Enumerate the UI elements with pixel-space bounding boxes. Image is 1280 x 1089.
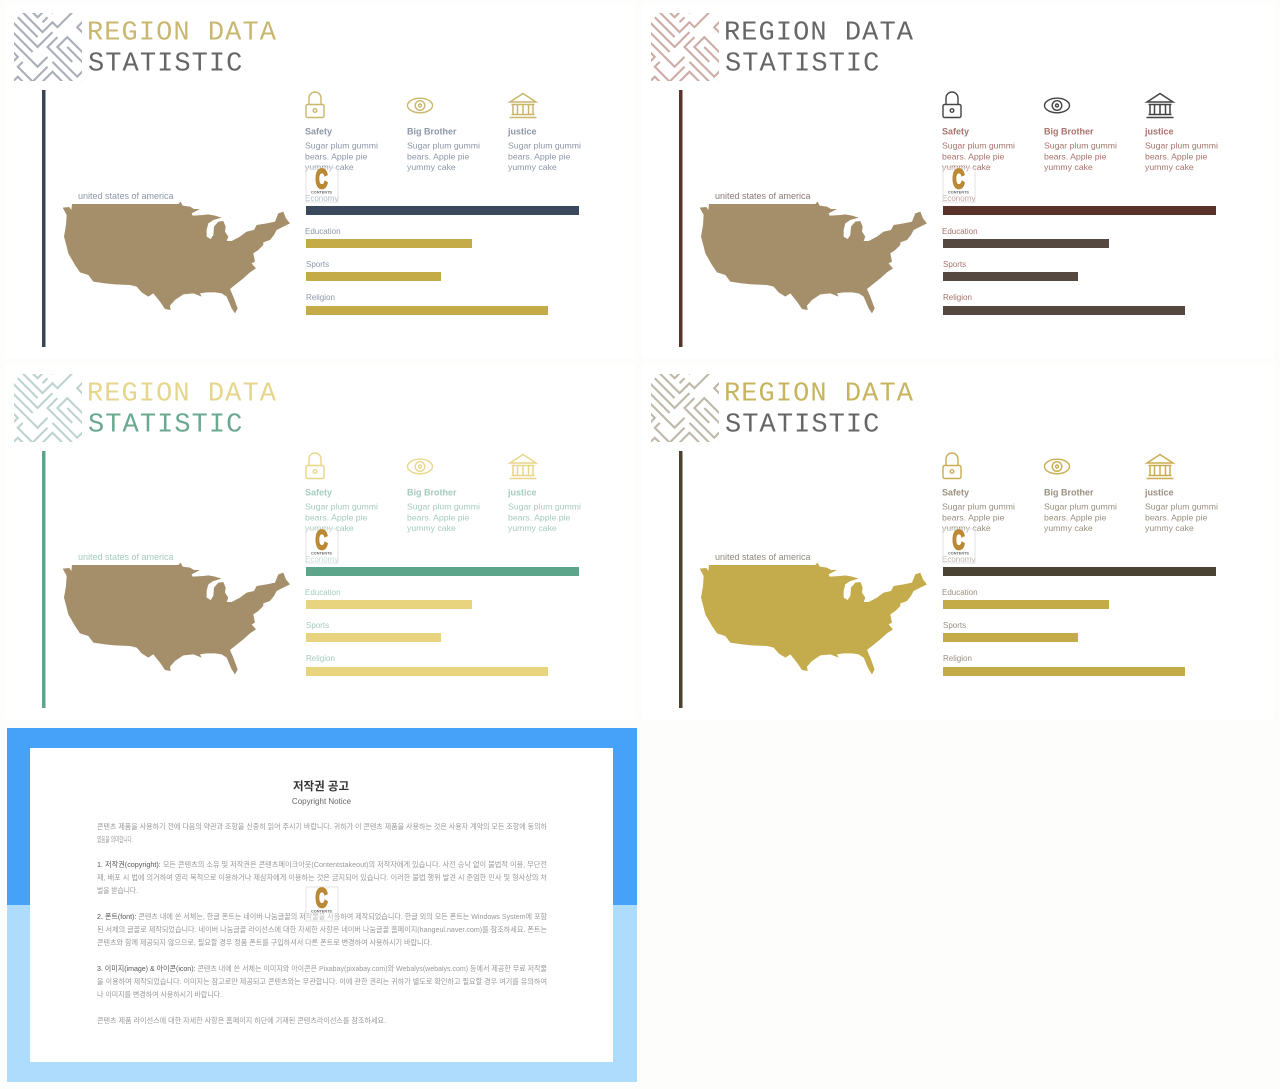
- logo watermark: [306, 525, 338, 563]
- pattern tile: [615, 339, 754, 477]
- bar chart: Education: [305, 588, 341, 597]
- bar chart: Economy: [305, 194, 338, 203]
- features: yummy cake: [305, 162, 354, 172]
- features: Sugar plum gummi: [1145, 502, 1218, 512]
- icon: bank: [510, 454, 536, 478]
- bar chart: Religion: [943, 293, 972, 302]
- features: [942, 488, 1218, 533]
- panel: slide 3 teal and pale yellow: [0, 339, 581, 708]
- bar chart: Sports: [306, 260, 329, 269]
- features: Big Brother: [407, 126, 457, 136]
- features: Big Brother: [1044, 126, 1094, 136]
- features: yummy cake: [1044, 162, 1093, 172]
- map of USA: [700, 202, 927, 313]
- vertical rule: [42, 90, 46, 347]
- white sheet: [30, 748, 613, 1062]
- logo watermark: [306, 883, 338, 921]
- features: Sugar plum gummi: [407, 502, 480, 512]
- features: bears. Apple pie: [1044, 512, 1106, 522]
- title: [724, 18, 914, 80]
- notice body: 2. 폰트(font): 콘텐츠 내에 쓴 서체는, 한글 폰트는 네이버 나눔글꼴의 저작물을 사용하여 제작되었습니다. 한글 외의 모든 폰트는 Windows System에 포함: [97, 912, 547, 921]
- title: REGION DATA: [87, 18, 277, 48]
- features: Sugar plum gummi: [942, 140, 1015, 150]
- features: yummy cake: [407, 162, 456, 172]
- map label: united states of america: [78, 191, 174, 201]
- features: bears. Apple pie: [1044, 152, 1106, 162]
- bar chart: Education: [942, 588, 978, 597]
- bar chart: [942, 555, 1216, 676]
- features: bears. Apple pie: [1145, 512, 1207, 522]
- icon: bank: [1146, 94, 1174, 118]
- bar chart: Economy: [305, 555, 338, 564]
- bar chart: Religion: [306, 654, 335, 663]
- title: STATISTIC: [88, 410, 243, 440]
- panel: slide 1 navy and gold: [0, 0, 581, 347]
- map label: united states of america: [78, 552, 174, 562]
- bar chart: Sports: [306, 621, 329, 630]
- features: yummy cake: [407, 523, 456, 533]
- vertical rule: [42, 451, 46, 708]
- notice body: 된 서체의 글꼴로 제작되었습니다. 네이버 나눔글꼴 라이선스에 대한 자세한 사항은 네이버 나눔글꼴 홈페이지(hangeul.naver.com)를 참조하세요. 폰트는: [97, 925, 547, 934]
- features: bears. Apple pie: [305, 152, 367, 162]
- bar chart: Economy: [942, 555, 975, 564]
- slide background: top left: [5, 3, 635, 358]
- bar chart: Economy: [942, 194, 975, 203]
- icon: bank: [1146, 454, 1174, 478]
- features: bears. Apple pie: [508, 152, 570, 162]
- slide background: middle right: [642, 364, 1274, 719]
- features: [305, 488, 581, 533]
- features: Sugar plum gummi: [305, 502, 378, 512]
- features: Sugar plum gummi: [508, 140, 581, 150]
- features: bears. Apple pie: [305, 512, 367, 522]
- bar chart: [942, 194, 1216, 315]
- features: bears. Apple pie: [1145, 152, 1207, 162]
- slide background: top right: [642, 3, 1274, 358]
- bar chart: [305, 194, 579, 315]
- features: justice: [1144, 488, 1174, 498]
- panel: slide 4 brown and gold: [615, 339, 1218, 708]
- features: justice: [507, 126, 537, 136]
- slide background: middle left: [5, 364, 635, 719]
- notice subheading: Copyright Notice: [292, 797, 352, 806]
- bar chart: Religion: [306, 293, 335, 302]
- features: yummy cake: [942, 162, 991, 172]
- notice body: 나 이미지를 변경하여 사용하시기 바랍니다.: [97, 990, 222, 999]
- title: STATISTIC: [725, 50, 880, 80]
- title: STATISTIC: [725, 410, 880, 440]
- title: [87, 18, 277, 80]
- title: REGION DATA: [724, 18, 914, 48]
- title: [87, 380, 277, 440]
- features: bears. Apple pie: [942, 512, 1004, 522]
- pattern tile: [0, 339, 117, 477]
- title: REGION DATA: [724, 380, 914, 410]
- features: Safety: [305, 126, 332, 136]
- features: justice: [507, 488, 537, 498]
- notice heading: 저작권 공고: [293, 779, 349, 793]
- bar chart: Sports: [943, 621, 966, 630]
- features: Sugar plum gummi: [942, 502, 1015, 512]
- pattern tile: [0, 0, 117, 116]
- icon: eye: [408, 98, 432, 113]
- features: Sugar plum gummi: [305, 140, 378, 150]
- vertical rule: [679, 90, 682, 347]
- notice body: 재, 배포 시 법에 의거하여 영리 목적으로 이용하거나 제삼자에게 이용하는 것은 금지되어 있습니다. 이러한 불법 행위 발견 시 준엄한 민사 및 형사상의 처: [97, 873, 547, 882]
- logo watermark: [943, 525, 975, 563]
- notice body: 콘텐츠 제품을 사용하기 전에 다음의 약관과 조항을 신중히 읽어 주시기 바랍니다. 귀하가 이 콘텐츠 제품을 사용하는 것은 사용자 계약의 모든 조항에 동의하: [97, 822, 547, 831]
- logo watermark: [306, 164, 338, 202]
- bar chart: Education: [942, 227, 978, 236]
- features: bears. Apple pie: [407, 152, 469, 162]
- icon: lock: [306, 453, 324, 478]
- features: yummy cake: [1145, 162, 1194, 172]
- bar chart: Education: [305, 227, 341, 236]
- map of USA: [700, 563, 927, 674]
- blue frame top: [7, 728, 637, 905]
- features: yummy cake: [305, 523, 354, 533]
- features: yummy cake: [1145, 523, 1194, 533]
- features: Sugar plum gummi: [1145, 140, 1218, 150]
- icon: lock: [306, 92, 324, 118]
- features: Big Brother: [407, 488, 457, 498]
- bar chart: [305, 555, 579, 676]
- features: Safety: [942, 488, 969, 498]
- features: [305, 126, 581, 172]
- icon: lock: [943, 453, 961, 478]
- map label: united states of america: [715, 191, 811, 201]
- features: Big Brother: [1044, 488, 1094, 498]
- features: justice: [1144, 126, 1174, 136]
- features: Sugar plum gummi: [407, 140, 480, 150]
- notice body: [97, 822, 547, 1025]
- features: Safety: [942, 126, 969, 136]
- title: STATISTIC: [88, 50, 243, 80]
- icon: lock: [943, 92, 961, 118]
- map label: united states of america: [715, 552, 811, 562]
- icon: eye: [1044, 98, 1070, 113]
- icon: bank: [510, 94, 536, 118]
- pattern tile: [615, 0, 754, 116]
- features: [942, 126, 1218, 172]
- features: yummy cake: [508, 523, 557, 533]
- map of USA: [63, 563, 290, 674]
- features: bears. Apple pie: [407, 512, 469, 522]
- notice body: 3. 이미지(image) & 아이콘(icon): 콘텐츠 내에 쓴 서체는 이미지와 아이콘은 Pixabay(pixabay.com)와 Webalys(webalys.com) 등에서 제공한 무료 저작물: [97, 964, 547, 973]
- icon: eye: [408, 459, 432, 474]
- notice body: 1. 저작권(copyright): 모든 콘텐츠의 소유 및 저작권은 콘텐츠메이크아웃(Contentstakeout)의 저작자에게 있습니다. 사전 승낙 없이 불법적 이용, 무단전: [97, 860, 547, 869]
- features: yummy cake: [508, 162, 557, 172]
- notice body: 였음을 의미합니다.: [97, 835, 133, 844]
- map of USA: [63, 202, 290, 313]
- features: Sugar plum gummi: [508, 502, 581, 512]
- panel: slide 2 maroon and charcoal: [615, 0, 1218, 347]
- bar chart: Religion: [943, 654, 972, 663]
- features: bears. Apple pie: [942, 152, 1004, 162]
- blue frame bottom: [7, 905, 637, 1082]
- features: yummy cake: [1044, 523, 1093, 533]
- panel: copyright notice: [7, 728, 637, 1082]
- icon: eye: [1044, 459, 1070, 474]
- features: Safety: [305, 488, 332, 498]
- bar chart: Sports: [943, 260, 966, 269]
- notice body: 을 이용하여 제작되었습니다. 이미지는 참고로만 제공되고 콘텐츠와는 무관합니다. 이에 관한 권리는 귀하가 별도로 확인하고 필요할 경우 여기를 유의하여: [97, 977, 547, 986]
- notice body: 벌을 받습니다.: [97, 886, 138, 895]
- vertical rule: [679, 451, 682, 708]
- features: bears. Apple pie: [508, 512, 570, 522]
- notice body: 콘텐츠와 함께 제공되지 않으므로, 필요할 경우 정품 폰트를 구입하셔서 다른 폰트로 변경하여 사용하시기 바랍니다.: [97, 938, 432, 947]
- notice body: 콘텐츠 제품 라이선스에 대한 자세한 사항은 홈페이지 하단에 기재된 콘텐츠라이선스를 참조하세요.: [97, 1016, 386, 1025]
- title: REGION DATA: [87, 380, 277, 410]
- features: yummy cake: [942, 523, 991, 533]
- title: [724, 380, 914, 440]
- features: Sugar plum gummi: [1044, 502, 1117, 512]
- features: Sugar plum gummi: [1044, 140, 1117, 150]
- logo watermark: [943, 164, 975, 202]
